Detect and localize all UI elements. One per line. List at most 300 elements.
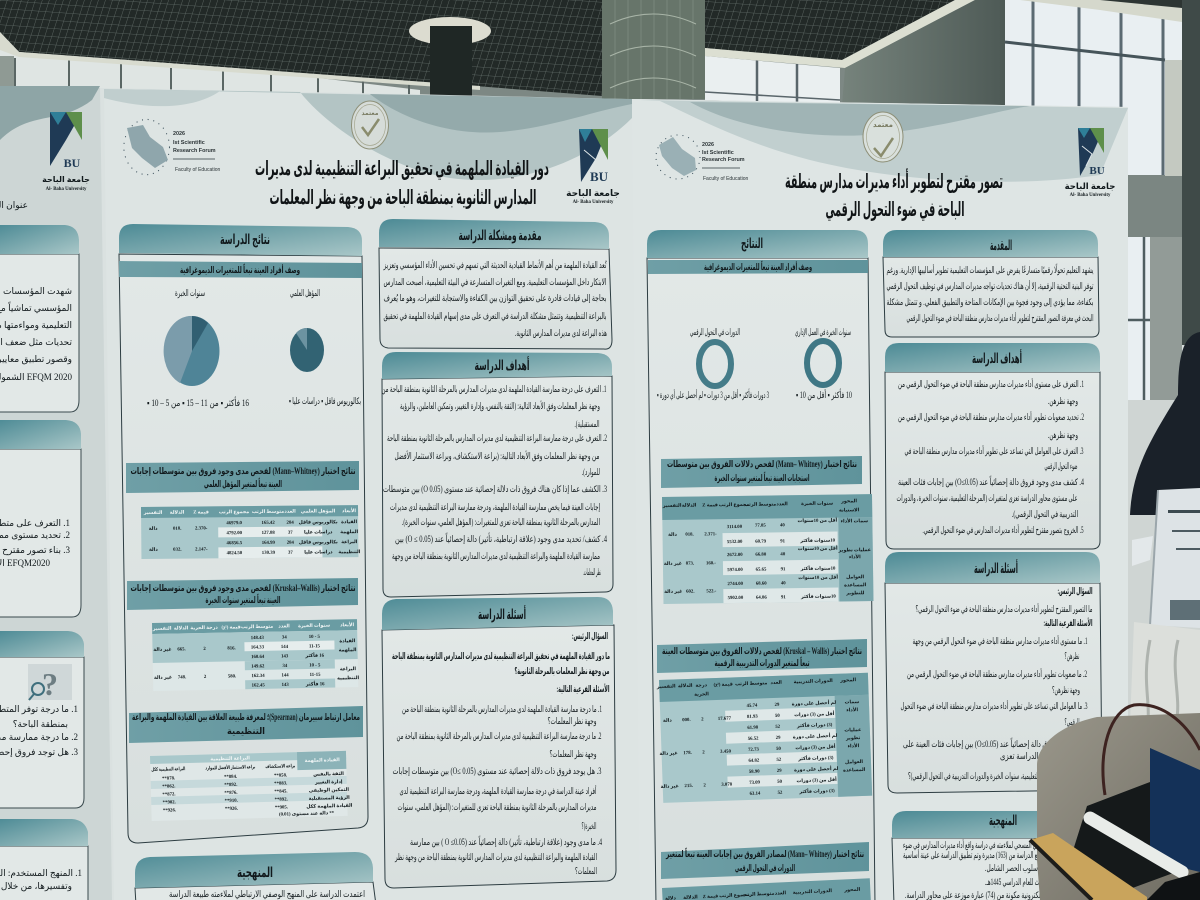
demographics band <box>648 260 868 274</box>
table: Kruskal-Wallis: 144 <box>281 645 289 650</box>
intro text: الابتكار داخل المؤسسات التعليمية. ومع التغيرات المتسارعة في البيئة التعليمية، أصبحت المدارس <box>384 276 606 287</box>
panel: methodology <box>892 811 1110 900</box>
table: Kruskal-Wallis courses: 3.078 <box>721 782 733 788</box>
table: Kruskal-Wallis: 143 <box>281 654 289 660</box>
icon: university logo: جامعة الباحة <box>42 175 90 184</box>
table: Kruskal-Wallis courses: لم أحصل على دورة <box>793 732 838 740</box>
questions text: أفراد عينة الدراسة في درجة ممارسة القيادة الملهمة، ودرجة ممارسة البراعة التنظيمية لدى <box>400 785 596 796</box>
title <box>255 158 549 209</box>
forum caption: Ist Scientific <box>173 140 205 146</box>
pie chart: qualification: بكالوريوس فاقل ▪ دراسات عليا ▪ <box>289 396 361 406</box>
table: Spearman correlation: ** دالة عند مستوى (0.01) <box>279 810 335 818</box>
table: Kruskal-Wallis: 5 - 10 <box>309 663 321 668</box>
table: Kruskal-Wallis courses: .000 <box>682 718 691 723</box>
goals text: التدريبية في التحول الرقمي). <box>1012 509 1078 519</box>
table: Kruskal-Wallis: القيادة <box>339 638 356 644</box>
table: Mann-Whitney experience: التفسير <box>662 503 682 509</box>
panel: study questions: الأسئلة الفرعية التالية: <box>1044 617 1092 629</box>
table: Kruskal-Wallis courses: 52 <box>775 725 781 730</box>
table: Mann-Whitney courses: الدورات التدريبية <box>793 888 832 896</box>
panel: intro <box>0 225 79 412</box>
right-hand room foreground: person, stand, table, chair <box>1030 332 1200 900</box>
table: Kruskal-Wallis courses: المساعدة <box>843 767 866 774</box>
person in black abaya <box>1130 332 1200 515</box>
table: Kruskal-Wallis courses: تطوير <box>845 735 861 742</box>
table: Mann-Whitney experience: 5974.00 <box>727 568 743 573</box>
table: Mann-Whitney: 164.99 <box>262 541 276 546</box>
forum caption: Research Forum <box>702 157 745 163</box>
table: Spearman correlation: .845** <box>274 789 288 795</box>
table: Mann-Whitney experience: 10سنوات فأكثر <box>800 593 836 600</box>
table: Mann-Whitney experience: للتطوير <box>845 590 865 596</box>
forum caption: Faculty of Education <box>175 167 221 173</box>
table: Mann-Whitney: الملهمة <box>340 529 359 535</box>
table: Kruskal-Wallis: الملهمة <box>339 647 357 653</box>
table: Mann-Whitney experience: 68.60 <box>756 582 767 587</box>
table: Mann-Whitney: .018 <box>173 527 181 532</box>
table: Mann-Whitney: 46979.0 <box>226 521 243 526</box>
table: Mann-Whitney: الأبعاد <box>342 507 356 514</box>
table: Mann-Whitney experience: دالة <box>668 532 678 538</box>
panel: methodology: المنهجية <box>237 866 273 881</box>
goals text: 2. التعرف على درجة ممارسة البراعة التنظيمية لدى مديرات المدارس بالمرحلة الثانوية بمنطقة الباحة <box>387 433 607 443</box>
panel: methodology: من المديرات باستخدام أسلوب الحصر الشامل. <box>985 862 1095 873</box>
table: Mann-Whitney experience: .602 <box>686 590 695 595</box>
table: Kruskal-Wallis courses: 45.74 <box>746 704 758 709</box>
table: Mann-Whitney: القيادة <box>341 519 357 525</box>
table: Mann-Whitney experience: -.522 <box>706 589 717 594</box>
table: Mann-Whitney: 46856.5 <box>227 541 243 546</box>
second poster: digital transformation <box>632 99 1200 900</box>
table: Kruskal-Wallis courses: (3) دورات فأكثر <box>796 721 833 729</box>
draped white table <box>1130 622 1200 725</box>
table: Kruskal-Wallis courses: الأداء <box>847 742 860 749</box>
panel: study goals: أهداف الدراسة <box>474 356 530 374</box>
table: Kruskal-Wallis courses: لم أحصل على دورة <box>792 699 836 707</box>
table: Kruskal-Wallis courses: الدلالة <box>678 683 693 689</box>
icon: question mark and magnifier: ? <box>42 666 58 702</box>
heading: Kruskal-Wallis <box>657 639 867 673</box>
table: Mann-Whitney courses: العدد <box>775 890 787 897</box>
table: Kruskal-Wallis: 162.45 <box>252 683 265 689</box>
panel: study goals <box>382 352 613 597</box>
questions text <box>900 586 1093 781</box>
table: Kruskal-Wallis: 160.64 <box>251 655 265 660</box>
table: Kruskal-Wallis courses: عمليات <box>844 727 861 734</box>
table: Kruskal-Wallis courses: 50 <box>777 780 783 785</box>
table: Mann-Whitney experience: 2744.00 <box>727 582 744 587</box>
heading: Mann-Whitney: نتائج اختبار (Mann– Whitney) لفحص دلالات الفروق بين متوسطات <box>667 459 857 470</box>
table: Mann-Whitney experience: 91 <box>781 595 786 600</box>
questions text: ما دور القيادة الملهمة في تحقيق البراعة التنظيمية لدى مديرات المدارس الثانوية بمنطقة الباحة <box>392 651 610 662</box>
table: Kruskal-Wallis courses: 52 <box>778 791 783 796</box>
header wave <box>0 86 100 140</box>
table: Spearman correlation: .872** <box>162 792 176 798</box>
table: Mann-Whitney experience: 66.80 <box>755 553 767 558</box>
table: Kruskal-Wallis courses: العدد <box>770 680 782 686</box>
table: Kruskal-Wallis courses: سمات <box>845 699 860 706</box>
table: Mann-Whitney experience: .873 <box>686 562 694 567</box>
icon: Saudi map with dots <box>124 119 169 175</box>
table: Mann-Whitney: البراعة <box>341 539 358 545</box>
demographics band <box>119 261 362 278</box>
questions text: القيادة الملهمة والبراعة التنظيمية لدى مديرات المدارس الثانوية بمنطقة الباحة من وجهة نظر <box>394 852 597 862</box>
small round column <box>409 17 491 96</box>
questions text: السؤال الرئيس: <box>1058 586 1092 597</box>
table: Spearman correlation: براعة الاستكشاف <box>265 763 296 770</box>
panel: methodology: واعتمدت على استبانة إلكترونية مكونة من (74) عبارة موزعة على محاور الدراسة. <box>905 890 1095 900</box>
table: Kruskal-Wallis courses: 29 <box>774 703 780 708</box>
table: Kruskal-Wallis: .816 <box>227 646 236 652</box>
left windows <box>0 40 420 100</box>
table: Mann-Whitney experience: الأداء <box>849 553 861 560</box>
panel: methodology: خلال الفصل الدراسي الثالث للعام الدراسي 1445هـ. <box>985 877 1095 887</box>
table: Spearman correlation: .892** <box>224 783 237 788</box>
questions text <box>392 631 610 876</box>
table: Mann-Whitney experience: العوامل <box>846 574 865 580</box>
table: Kruskal-Wallis courses: الأداء <box>846 706 859 713</box>
forum caption <box>173 131 221 173</box>
forum caption: Research Forum <box>173 148 216 154</box>
goals text: وجهة نظر المعلمات وفق الأبعاد التالية: (الثقة بالنفس، وإدارة التغيير، وتمكين العاملين، والرؤية <box>400 400 600 412</box>
table: Mann-Whitney: 284 <box>287 541 295 546</box>
table: Kruskal-Wallis courses: 52 <box>776 758 782 763</box>
centre windows <box>705 0 975 104</box>
table: Kruskal-Wallis courses: أقل من (3) دورات <box>795 743 836 751</box>
pie chart: qualification: المؤهل العلمي <box>290 288 320 298</box>
heading: Kruskal-Wallis: العينة تبعاً لمتغير سنوات الخبرة <box>206 593 280 606</box>
questions text: الرقمي؟ <box>1064 717 1080 727</box>
panel: questions: بمنطقة الباحة؟ <box>13 719 68 729</box>
icon: university logo: Al- Baha University <box>1070 193 1111 198</box>
table: Mann-Whitney experience: 5902.00 <box>728 596 744 601</box>
intro text: هذه البراعة لدى مديرات المدارس الثانوية. <box>515 328 607 338</box>
goals text: من وجهة نظر المعلمات وفق الأبعاد التالية: (براعة الاستكشاف، وبراعة الاستثمار الأفضل <box>394 450 600 461</box>
table: Kruskal-Wallis <box>152 619 360 691</box>
table: Kruskal-Wallis courses: 3.450 <box>720 750 732 755</box>
goals text: 4. كشف/ تحديد مدى وجود (علاقة ارتباطية، تأثير) دالة إحصائياً عند (O ≤ 0.05) بين <box>395 532 607 545</box>
intro text: بالبراعة التنظيمية. وتتمثل مشكلة الدراسة في التعرف على مدى إسهام القيادة الملهمة في تحقيق <box>384 311 606 322</box>
questions text: وجهة نظرهن؟ <box>1052 685 1080 695</box>
heading: Mann-Whitney courses: نتائج اختبار (Mann– Whitney) لمصادر الفروق بين إجابات العينة تبعاً لمتغير <box>665 847 864 860</box>
goals text: 1. التعرف على درجة ممارسة القيادة الملهمة لدى مديرات المدارس بالمرحلة الثانوية بمنطقة الباحة من <box>382 384 606 394</box>
table: Mann-Whitney experience: 65.65 <box>756 568 767 573</box>
panel: introduction and problem: مقدمة ومشكلة الدراسة <box>458 229 542 244</box>
panel: study goals: نظر المعلمات. <box>583 567 601 577</box>
table: Spearman correlation: القيادة الملهمة ككل <box>306 803 353 810</box>
table: Kruskal-Wallis: غير دالة <box>154 675 172 681</box>
table: Mann-Whitney experience: سنوات الخبرة <box>801 501 833 507</box>
questions text: نظرهن؟ <box>1064 651 1080 661</box>
table: Mann-Whitney experience <box>662 494 873 604</box>
table: Mann-Whitney experience: 40 <box>780 552 786 557</box>
table: Kruskal-Wallis: العدد <box>278 623 290 630</box>
heading: Mann-Whitney: استجابات العينة تبعاً لمتغير سنوات الخبرة <box>714 471 810 484</box>
side poster at far left <box>0 86 112 900</box>
table: Kruskal-Wallis courses: 50 <box>775 714 780 719</box>
icon: university logo <box>1065 128 1115 198</box>
table: Kruskal-Wallis courses: غير دالة <box>659 750 678 757</box>
table: Spearman correlation: .876** <box>224 791 238 796</box>
title: الباحة في ضوء التحول الرقمي <box>826 199 964 222</box>
icon: university logo: Al- Baha University <box>573 200 614 205</box>
panel: study goals <box>885 343 1100 549</box>
table: Mann-Whitney: الدلالة <box>170 510 185 516</box>
goals text: المدارس بالمرحلة الثانوية بمنطقة الباحة تعزى للمتغيرات: (المؤهل العلمي، سنوات الخبرة). <box>402 517 600 527</box>
heading: Mann-Whitney courses <box>661 842 869 879</box>
panel: results <box>647 230 875 900</box>
goals text: إجابات العينة فيما يخص ممارسة القيادة الملهمة، ودرجة ممارسة البراعة التنظيمية لدى مديرات <box>390 502 600 513</box>
goals text: ضوء التحول الرقمي <box>1044 461 1078 471</box>
table: Kruskal-Wallis: .665 <box>177 647 186 653</box>
table: Mann-Whitney experience: 77.85 <box>755 524 766 529</box>
forum caption: Ist Scientific <box>702 150 734 156</box>
heading: Mann-Whitney: نتائج اختبار (Mann–Whitney) لفحص مدى وجود فروق بين متوسطات إجابات <box>131 466 356 477</box>
table: Kruskal-Wallis: 143 <box>282 683 289 688</box>
icon: accreditation seal: معتمد <box>873 121 893 129</box>
icon: accreditation seal <box>863 112 903 162</box>
table: Kruskal-Wallis courses: الحرية <box>694 691 709 698</box>
table: Kruskal-Wallis courses: 73.09 <box>749 781 761 786</box>
table: Kruskal-Wallis courses: 56.52 <box>748 737 759 742</box>
table: Mann-Whitney experience: غير دالة <box>664 561 682 567</box>
chair back <box>1037 713 1200 900</box>
table: Kruskal-Wallis courses: 2 <box>701 717 704 723</box>
table: Mann-Whitney: قيمة Z <box>193 510 209 516</box>
intro text: بكفاءة، مما يؤدي إلى وجود فجوة بين الإمكانات المتاحة والتطبيق الفعلي. و تتمثل مشكلة <box>886 297 1094 308</box>
table: Mann-Whitney: 165.42 <box>262 521 275 526</box>
table: Mann-Whitney: .032 <box>173 548 182 553</box>
panel: methodology: اعتمدت الدراسة على المنهج الوصفي الارتباطي لملاءمته طبيعة الدراسة <box>169 889 365 899</box>
icon: university logo <box>566 129 620 205</box>
table: Kruskal-Wallis courses: المحور <box>839 677 857 684</box>
icon: university logo <box>42 112 90 192</box>
table: Mann-Whitney experience: متوسط الرتب <box>744 501 776 508</box>
table: Spearman correlation: .926** <box>163 808 176 814</box>
table: Mann-Whitney: 4824.50 <box>227 551 243 556</box>
table: Mann-Whitney experience: المحور <box>840 498 857 505</box>
main poster: inspiring leadership <box>104 89 646 900</box>
heading: Kruskal-Wallis: تبعاً لمتغير الدورات التدريبية الرقمية <box>714 656 810 669</box>
table: Kruskal-Wallis: درجة الحرية <box>190 625 218 631</box>
table: Spearman correlation: .878** <box>162 776 175 782</box>
goals text: 1. التعرف على مستوى أداء مديرات مدارس منطقة الباحة في ضوء التحول الرقمي من <box>898 378 1084 389</box>
heading: Mann-Whitney <box>126 461 359 493</box>
questions text: 4. ما مدى وجود (علاقة ارتباطية، تأثير) دالة إحصائياً عند (O ≤0.05 ) بين ممارسة <box>410 835 602 848</box>
table: Spearman correlation: التمكين الوظيفي <box>309 787 349 794</box>
table: Mann-Whitney experience: الدلالة <box>682 503 697 509</box>
panel: results: سنوات الخبرة في العمل الإداري <box>795 327 851 338</box>
dark object corner <box>1147 872 1200 900</box>
wooden desk tray <box>1030 833 1147 900</box>
table: Mann-Whitney: 4792.00 <box>226 531 243 536</box>
table: Mann-Whitney experience: .018 <box>685 533 694 538</box>
icon: university logo: جامعة الباحة <box>566 188 620 198</box>
table: Mann-Whitney: 37 <box>288 551 293 556</box>
questions text: مديرات المدارس بالمرحلة الثانوية بمنطقة الباحة تعزى للمتغيرات: (المؤهل العلمي، سنوات <box>398 802 597 812</box>
table: Kruskal-Wallis courses: 50 <box>776 747 782 752</box>
table: Mann-Whitney experience: 2672.00 <box>727 553 743 558</box>
table: Mann-Whitney: دراسات عليا <box>304 549 333 556</box>
donut: years of administrative experience: 10 فأكثر ▪ أقل من 10 ▪ <box>796 388 852 400</box>
icon: university logo: BU <box>64 156 81 170</box>
table: Spearman correlation: .892** <box>275 797 288 803</box>
heading: Mann-Whitney <box>661 456 862 488</box>
table: Spearman correlation: .926** <box>225 807 238 812</box>
pie chart: years of experience: 16 فأكثر ▪ من 11 – 15 ▪ من 5 – 10 ▪ <box>147 396 249 408</box>
table: Mann-Whitney: دراسات عليا <box>304 529 333 536</box>
table: Mann-Whitney experience: 91 <box>780 539 786 544</box>
heading: Mann-Whitney courses: الدورات في التحول الرقمي <box>735 863 795 874</box>
questions text: من وجهة نظر المعلمات بالمرحلة الثانوية؟ <box>514 666 610 677</box>
table: Spearman correlation: الثقة بالنفس <box>313 771 344 778</box>
hall background: ceiling, columns, windows <box>0 0 1200 405</box>
goals text: وجهة نظرهن. <box>1048 430 1078 440</box>
goals text: 2. تحديد صعوبات تطوير أداء مديرات مدارس منطقة الباحة في ضوء التحول الرقمي من <box>898 411 1084 422</box>
table: Kruskal-Wallis: 149.62 <box>251 664 265 670</box>
table: Mann-Whitney: مجموع الرتب <box>219 509 249 515</box>
table: Spearman correlation: .858** <box>274 773 287 779</box>
panel: methodology: المنهجية <box>989 814 1017 829</box>
table: Spearman correlation: الرؤية المستقبلية <box>309 795 350 802</box>
panel header <box>119 224 362 256</box>
table: Mann-Whitney experience: العدد <box>776 501 788 507</box>
panel: questions <box>0 631 84 808</box>
icon: accreditation seal: معتمد <box>361 111 379 117</box>
table: Spearman correlation: القيادة الملهمة <box>305 757 340 764</box>
table: Kruskal-Wallis courses: دالة <box>663 718 672 724</box>
pie chart: years of experience <box>147 288 249 408</box>
goals text: للموارد). <box>582 467 600 477</box>
donut: digital transformation courses: 3 دورات فأكثر ▪ أقل من 3 دورات ▪ لم أحصل على أي دورة ▪ <box>657 388 769 401</box>
panel: study questions: أسئلة الدراسة <box>974 559 1018 577</box>
table: Mann-Whitney experience: 40 <box>781 581 786 586</box>
table: Mann-Whitney <box>141 505 361 559</box>
table: Kruskal-Wallis courses: 29 <box>776 736 781 741</box>
intro text <box>383 259 607 338</box>
ceiling grid <box>0 0 602 96</box>
table: Mann-Whitney experience: 5532.00 <box>727 540 743 545</box>
title: المدارس الثانوية بمنطقة الباحة من وجهة نظر المعلمات <box>270 187 536 209</box>
table: Mann-Whitney experience: 40 <box>780 523 785 528</box>
table: Kruskal-Wallis courses: غير دالة <box>661 783 679 790</box>
table: Kruskal-Wallis: الدلالة <box>174 625 189 632</box>
table: Kruskal-Wallis: 16 فأكثر <box>305 680 325 688</box>
table: Kruskal-Wallis courses: 81.93 <box>747 715 758 720</box>
forum caption: Faculty of Education <box>703 176 749 182</box>
table: Kruskal-Wallis: 164.33 <box>251 645 265 651</box>
questions text: الأسئلة الفرعية التالية: <box>556 683 610 695</box>
table: Kruskal-Wallis courses: .215 <box>684 784 693 789</box>
table: Spearman correlation: البراعة التنظيمية <box>210 755 250 762</box>
table: Mann-Whitney experience: أقل من 10سنوات <box>797 517 838 524</box>
icon: university logo: BU <box>590 169 609 184</box>
table: Mann-Whitney experience: أقل من 10سنوات <box>798 574 838 581</box>
table: Kruskal-Wallis courses: متوسط الرتب <box>735 680 767 687</box>
table: Kruskal-Wallis courses: 72.73 <box>748 748 760 753</box>
panel: study questions <box>382 597 616 888</box>
table: Kruskal-Wallis courses: لم أحصل على دورة <box>794 765 839 773</box>
table: Kruskal-Wallis: .748 <box>178 675 186 681</box>
table: Spearman correlation: البراعة التنظيمية ككل <box>151 766 186 773</box>
table: Mann-Whitney: التنظيمية <box>338 549 361 555</box>
title <box>785 167 1003 222</box>
panel: study questions: أسئلة الدراسة <box>478 605 526 623</box>
questions text: وجهة نظر المعلمات؟ <box>550 749 596 759</box>
table: Kruskal-Wallis courses: (3) دورات فأكثر <box>798 787 835 795</box>
pie chart: qualification <box>289 288 361 406</box>
table: Kruskal-Wallis courses <box>656 673 872 803</box>
table: Mann-Whitney experience: أقل من 10سنوات <box>798 545 838 552</box>
forum caption: 2026 <box>702 142 714 148</box>
table: Spearman correlation: .910** <box>225 799 238 804</box>
table: Mann-Whitney courses: قيمة Z <box>703 894 718 900</box>
panel: methodology: التحول الرقمي، وتكون مجتمع الدراسة من (163) مديرة وتم تطبيق الدراسة على عينة أساسية <box>903 849 1097 861</box>
table: Kruskal-Wallis courses: 29 <box>777 769 782 774</box>
table: Spearman correlation: .905** <box>275 805 288 811</box>
header wave <box>640 100 1128 182</box>
large green column <box>602 0 705 99</box>
table: Mann-Whitney experience: 91 <box>781 567 786 572</box>
table: Spearman correlation: .883** <box>274 781 287 787</box>
table: Mann-Whitney: 284 <box>287 521 294 526</box>
panel: results <box>119 224 368 843</box>
heading: Mann-Whitney: العينة تبعاً لمتغير المؤهل العلمي <box>204 477 282 490</box>
table: Mann-Whitney experience: 60.79 <box>755 540 767 545</box>
questions text: الخبرة)؟ <box>582 821 596 831</box>
table: Mann-Whitney experience: عمليات تطوير <box>837 547 871 554</box>
table: Kruskal-Wallis courses: 2 <box>703 783 707 789</box>
icon: university logo: جامعة الباحة <box>1065 181 1115 191</box>
table: Mann-Whitney: 37 <box>288 531 293 536</box>
panel header: النتائج <box>741 237 763 252</box>
intro text <box>886 263 1094 323</box>
icon: accreditation seal <box>352 101 388 149</box>
panel: study questions <box>885 552 1102 793</box>
table: Kruskal-Wallis courses: 58.90 <box>749 770 760 775</box>
panel header: نتائج الدراسة <box>220 233 270 248</box>
questions text: 3. هل يوجد فروق ذات دلالة إحصائية عند مستوى (O≤ 0.05) بين متوسطات إجابات <box>392 766 602 777</box>
table: Spearman correlation <box>150 751 353 821</box>
table: Kruskal-Wallis: 34 <box>282 635 287 641</box>
table: Kruskal-Wallis courses: درجة <box>695 683 708 689</box>
table: Kruskal-Wallis: 148.43 <box>251 636 265 641</box>
wall <box>842 0 1005 107</box>
bag strap <box>1103 705 1200 795</box>
table: Spearman correlation: .862** <box>162 784 175 790</box>
table: Mann-Whitney courses: متوسط الرتب <box>742 891 775 898</box>
heading: Spearman: التنظيمية <box>227 726 265 736</box>
header wave <box>104 89 632 180</box>
table: Kruskal-Wallis: 144 <box>281 673 289 679</box>
panel: introduction <box>883 230 1099 337</box>
table: Kruskal-Wallis: 5 - 10 <box>309 635 321 640</box>
table: Mann-Whitney experience: غير دالة <box>664 589 682 595</box>
blue book <box>1150 748 1200 872</box>
table: Mann-Whitney experience: -2.371 <box>704 532 717 537</box>
donut: digital transformation courses <box>657 327 769 401</box>
table: Kruskal-Wallis: 2 <box>203 647 206 652</box>
goals text <box>896 378 1084 535</box>
panel: goals <box>0 420 81 617</box>
questions text: 1. ما مستوى أداء مديرات مدارس منطقة الباحة في ضوء التحول الرقمي من وجهة <box>912 635 1088 646</box>
table: Kruskal-Wallis: 16 فأكثر <box>304 652 325 659</box>
table: Mann-Whitney experience: مجموع الرتب <box>719 502 749 508</box>
table: Kruskal-Wallis: .580 <box>228 674 236 680</box>
table: Mann-Whitney: دالة <box>149 547 158 553</box>
panel header <box>647 230 868 258</box>
table: Kruskal-Wallis: التنظيمية <box>337 675 360 681</box>
